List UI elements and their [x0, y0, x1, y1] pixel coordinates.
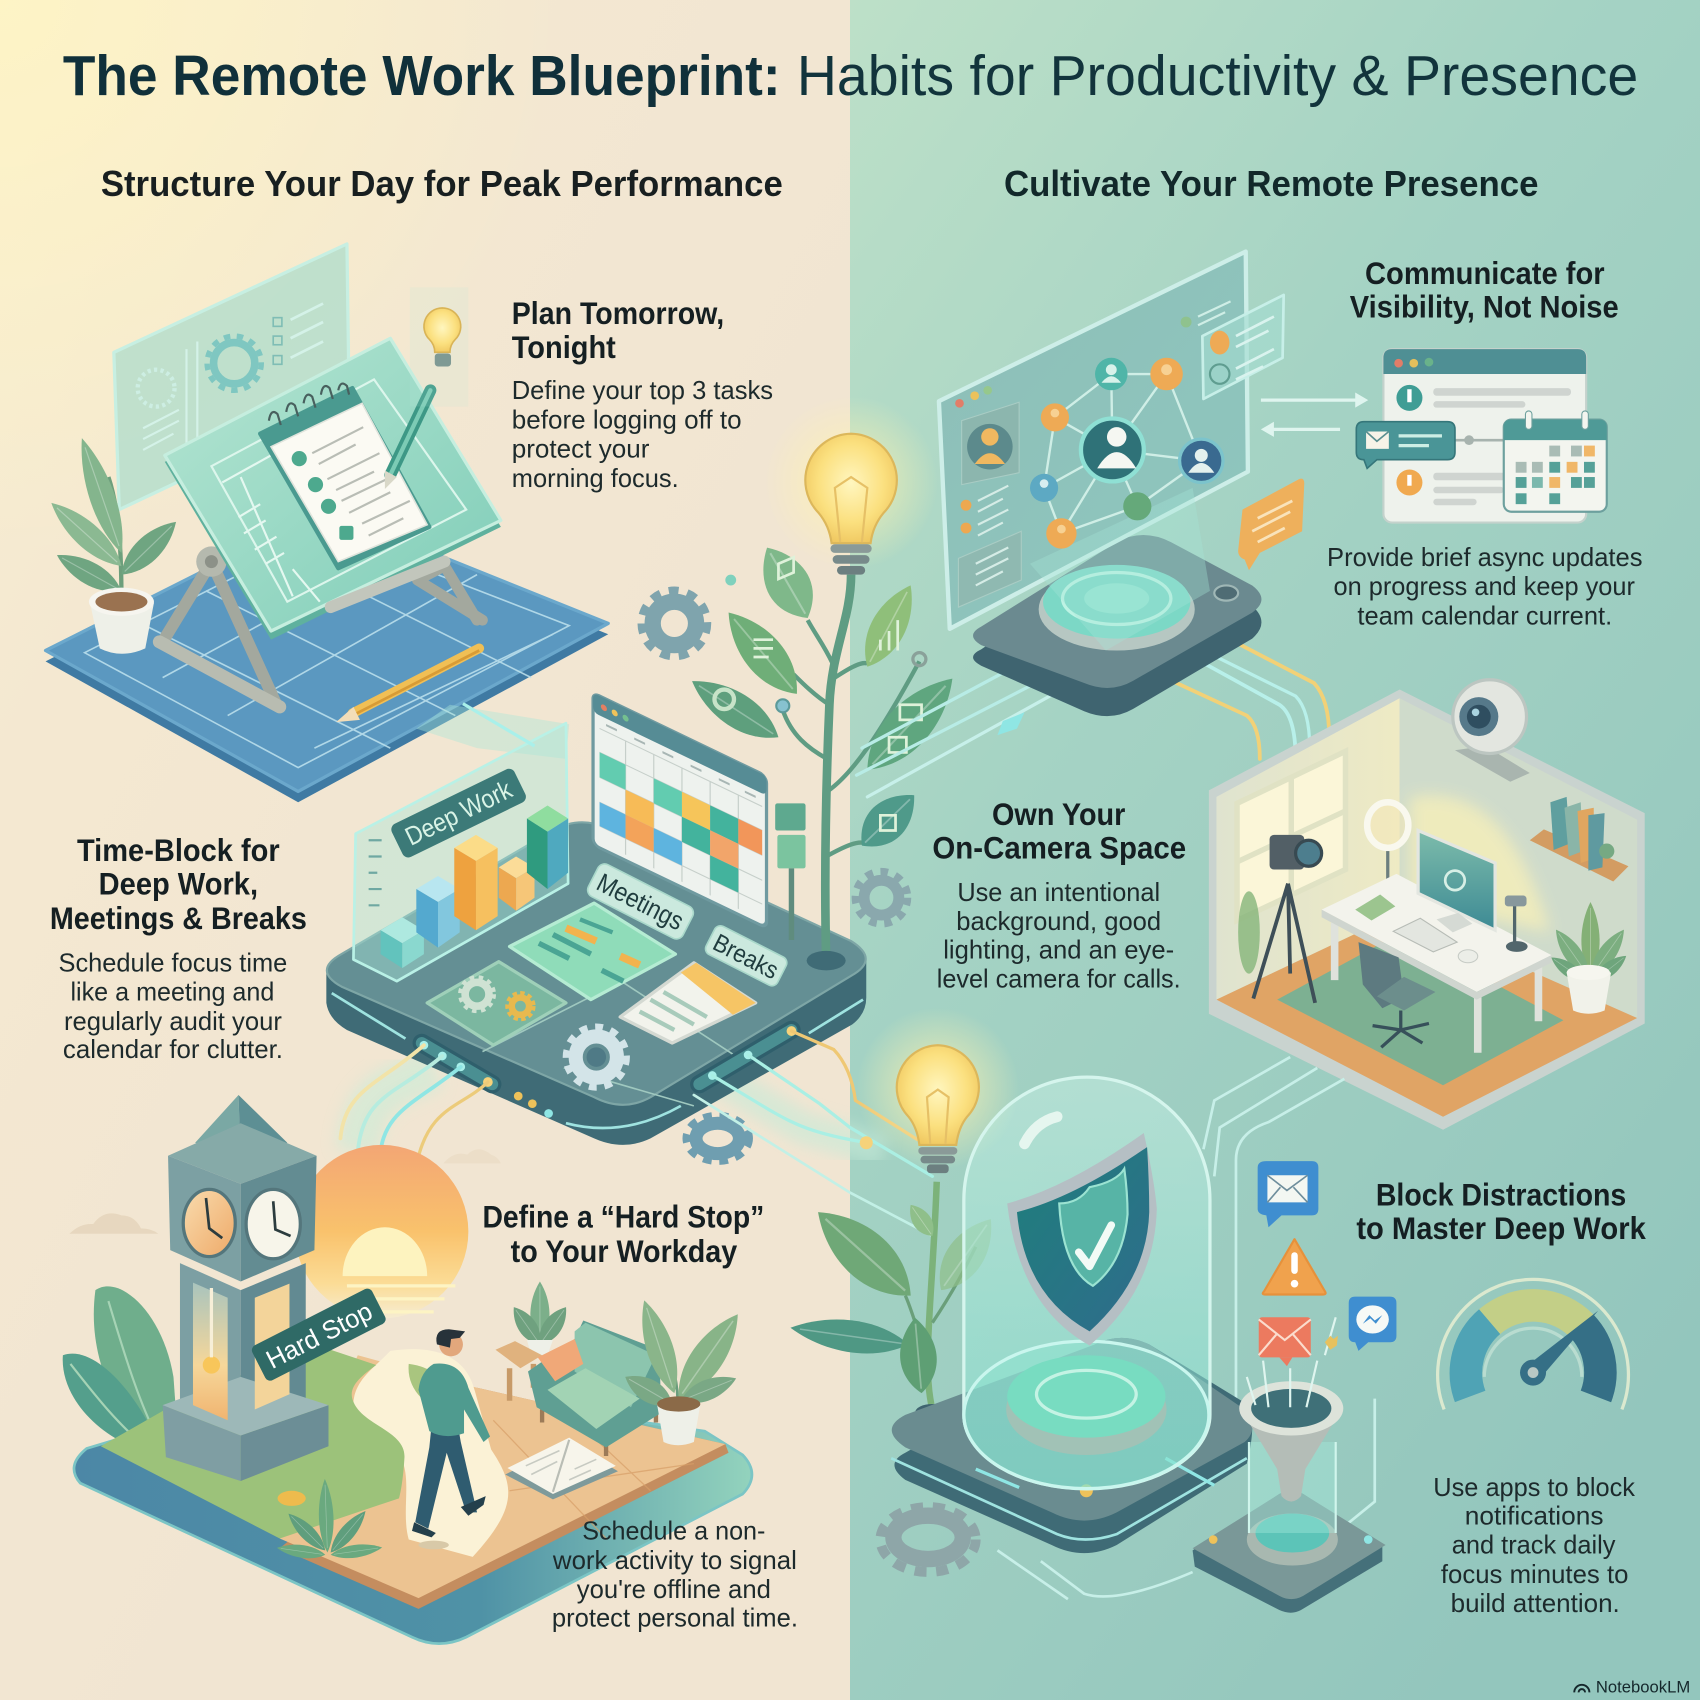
text: Block Distractions heading: Block Distractions	[1376, 1178, 1626, 1213]
text: Block Distractions body: build attention.	[1451, 1588, 1620, 1618]
glass chart panel	[353, 704, 569, 981]
text: Time-Block for Deep Work, Meetings & Breaks: like a meeting and	[70, 977, 274, 1007]
foreground plant	[276, 1479, 383, 1561]
open book	[505, 1438, 618, 1499]
notepad checklist	[260, 384, 429, 568]
icon: arrows	[1261, 392, 1368, 437]
platform ports and status lights	[420, 1026, 796, 1118]
text: Communicate for Visibility, Not Noise	[1350, 256, 1619, 325]
shelf with books	[1530, 797, 1628, 881]
potted plant by sofa	[620, 1296, 751, 1445]
clouds	[69, 1149, 501, 1234]
bulb on stem	[857, 1007, 1019, 1173]
connectors to room	[997, 1057, 1375, 1599]
platform	[891, 1338, 1252, 1553]
text: Plan Tomorrow, Tonight: morning focus.	[512, 463, 679, 493]
desk and computer	[1322, 830, 1551, 1053]
text: Communicate body: Provide brief async updates	[1327, 542, 1643, 572]
icon: gear upper	[642, 591, 707, 656]
network nodes	[1030, 301, 1231, 549]
walking person	[412, 1329, 490, 1549]
icon: platform gear	[567, 1028, 626, 1086]
translucent back panel	[114, 244, 349, 510]
gears card	[427, 962, 566, 1045]
shield icon	[1007, 1133, 1157, 1345]
calendar window	[593, 693, 767, 928]
text: Block Distractions body	[1433, 1472, 1636, 1618]
text: Define a Hard Stop: to Your Workday	[511, 1234, 738, 1269]
logo: NotebookLM: NotebookLM	[1596, 1677, 1690, 1696]
text: Plan Tomorrow, Tonight: Define your top 3 tasks	[512, 375, 773, 405]
small table plant	[506, 1282, 574, 1355]
text: Block Distractions body: Use apps to block	[1433, 1472, 1636, 1502]
soft connector bands to the tower	[358, 1068, 884, 1151]
drafting stand rear legs and board	[159, 338, 501, 707]
icon: blue mail bubble	[1258, 1161, 1318, 1227]
text: Own Your On-Camera Space	[932, 797, 1186, 994]
icon: gear right	[855, 872, 907, 924]
text: Own Your On-Camera Space: background, good	[956, 906, 1161, 936]
text: Plan Tomorrow, Tonight	[512, 296, 773, 493]
pencil	[336, 648, 479, 722]
text: Time-Block for Deep Work, Meetings & Breaks: Meetings & Breaks	[50, 901, 307, 936]
Hard Stop sign: Hard Stop	[261, 1296, 377, 1375]
breaks card	[620, 963, 756, 1043]
text: Communicate body: team calendar current.	[1357, 600, 1612, 630]
connectors to room and tree	[857, 640, 1329, 797]
icon: messenger bubble	[1349, 1297, 1396, 1351]
title: Habits for Productivity & Presence	[797, 44, 1638, 107]
icon: funnel with glass cylinder	[1193, 1317, 1386, 1613]
Breaks label: Breaks	[708, 929, 783, 985]
text: Define a Hard Stop: work activity to signal	[552, 1545, 797, 1575]
blue base board	[46, 510, 608, 802]
text: Plan Tomorrow, Tonight: protect your	[512, 434, 650, 464]
text: Block Distractions body: and track daily	[1452, 1530, 1615, 1560]
text: Time-Block for Deep Work, Meetings & Breaks: Schedule focus time	[59, 947, 287, 977]
tripod camera	[1253, 835, 1322, 1003]
text: Own Your On-Camera Space: lighting, and an eye-	[943, 934, 1174, 964]
illustration: blueprint drafting desk	[43, 244, 608, 802]
text: Time-Block for Deep Work, Meetings & Breaks	[50, 833, 307, 1064]
Meetings label: Meetings	[592, 867, 689, 936]
icon: orange chat bubble	[1238, 479, 1304, 570]
holographic panel	[939, 252, 1248, 651]
heading: left column: Structure Your Day for Peak Performance	[101, 164, 783, 204]
chair	[1358, 942, 1435, 1047]
webcam	[1453, 680, 1530, 782]
Deep Work label: Deep Work	[400, 774, 517, 852]
text: Communicate for Visibility, Not Noise: Visibility, Not Noise	[1350, 290, 1619, 325]
illustration: central scheduling platform	[326, 396, 968, 1236]
icon: calendar	[1504, 411, 1607, 512]
text: Block Distractions heading	[1356, 1178, 1646, 1246]
icon: message chip	[1356, 422, 1455, 468]
sun	[295, 1145, 468, 1318]
text: Time-Block for Deep Work, Meetings & Breaks: Time-Block for	[77, 833, 280, 868]
text: Define a Hard Stop: Define a “Hard Stop”	[482, 1199, 764, 1234]
text: Own Your On-Camera Space: On-Camera Space	[932, 831, 1186, 866]
text: Communicate body: on progress and keep your	[1334, 571, 1635, 601]
text: Time-Block for Deep Work, Meetings & Breaks: calendar for clutter.	[63, 1034, 283, 1064]
text: Plan Tomorrow, Tonight: Tonight	[512, 330, 616, 365]
text: Plan Tomorrow, Tonight: before logging off to	[512, 404, 742, 434]
platform	[973, 535, 1261, 716]
text: Time-Block for Deep Work, Meetings & Breaks: Deep Work,	[99, 866, 258, 901]
title	[63, 44, 1638, 107]
room shell	[1209, 690, 1645, 1130]
text: Block Distractions body: focus minutes to	[1441, 1559, 1628, 1589]
icon: gear lower	[686, 1116, 749, 1161]
icon: small light bulb	[410, 287, 468, 407]
icon: warning triangle	[1263, 1239, 1326, 1295]
text: Time-Block for Deep Work, Meetings & Breaks: regularly audit your	[64, 1006, 282, 1036]
floating glass card	[1202, 295, 1284, 399]
window	[1237, 751, 1345, 974]
heading: right column: Cultivate Your Remote Presence	[1004, 164, 1538, 204]
plant beside dome	[788, 1182, 1006, 1421]
text: Communicate body	[1327, 542, 1643, 630]
icon: communication window	[1383, 349, 1586, 523]
text: Block Distractions body: notifications	[1465, 1500, 1604, 1530]
text: Plan Tomorrow, Tonight: Plan Tomorrow,	[512, 296, 724, 331]
glass dome	[964, 1077, 1210, 1489]
text: Define a Hard Stop: protect personal time.	[552, 1602, 798, 1632]
icon: red mail	[1259, 1317, 1311, 1366]
green foliage	[63, 1286, 179, 1453]
pen	[385, 390, 430, 489]
potted plant	[43, 434, 185, 654]
illustration: clock tower and hard stop scene	[63, 1095, 752, 1644]
room plant	[1547, 902, 1631, 1014]
clock tower	[163, 1095, 329, 1481]
illustration: shield dome platform	[788, 1007, 1375, 1599]
illustration: network hologram platform	[857, 252, 1329, 797]
text: Block Distractions heading: to Master Deep Work	[1356, 1211, 1646, 1246]
gauge	[1438, 1279, 1628, 1409]
meetings card	[510, 903, 675, 1000]
platform base	[326, 822, 866, 1145]
icon: gear lower dome	[880, 1507, 976, 1572]
illustration: on-camera room	[1209, 680, 1645, 1130]
growth tree with light bulb	[683, 396, 968, 970]
island platform	[74, 1344, 752, 1644]
text: Own Your On-Camera Space: level camera for calls.	[937, 964, 1181, 994]
text: Define a Hard Stop: you're offline and	[577, 1574, 771, 1604]
sofa and table	[495, 1321, 661, 1456]
bar chart	[381, 806, 568, 968]
ring light	[1367, 802, 1408, 896]
text: Define a Hard Stop: Schedule a non-	[582, 1516, 765, 1546]
text: Own Your On-Camera Space: Use an intentional	[957, 877, 1160, 907]
title: The Remote Work Blueprint:	[63, 44, 781, 107]
text: Own Your On-Camera Space: Own Your	[992, 797, 1125, 832]
text: Communicate for Visibility, Not Noise: Communicate for	[1365, 256, 1605, 291]
text: Define a Hard Stop	[482, 1199, 798, 1632]
connectors: to clock tower and dome	[340, 1031, 932, 1236]
